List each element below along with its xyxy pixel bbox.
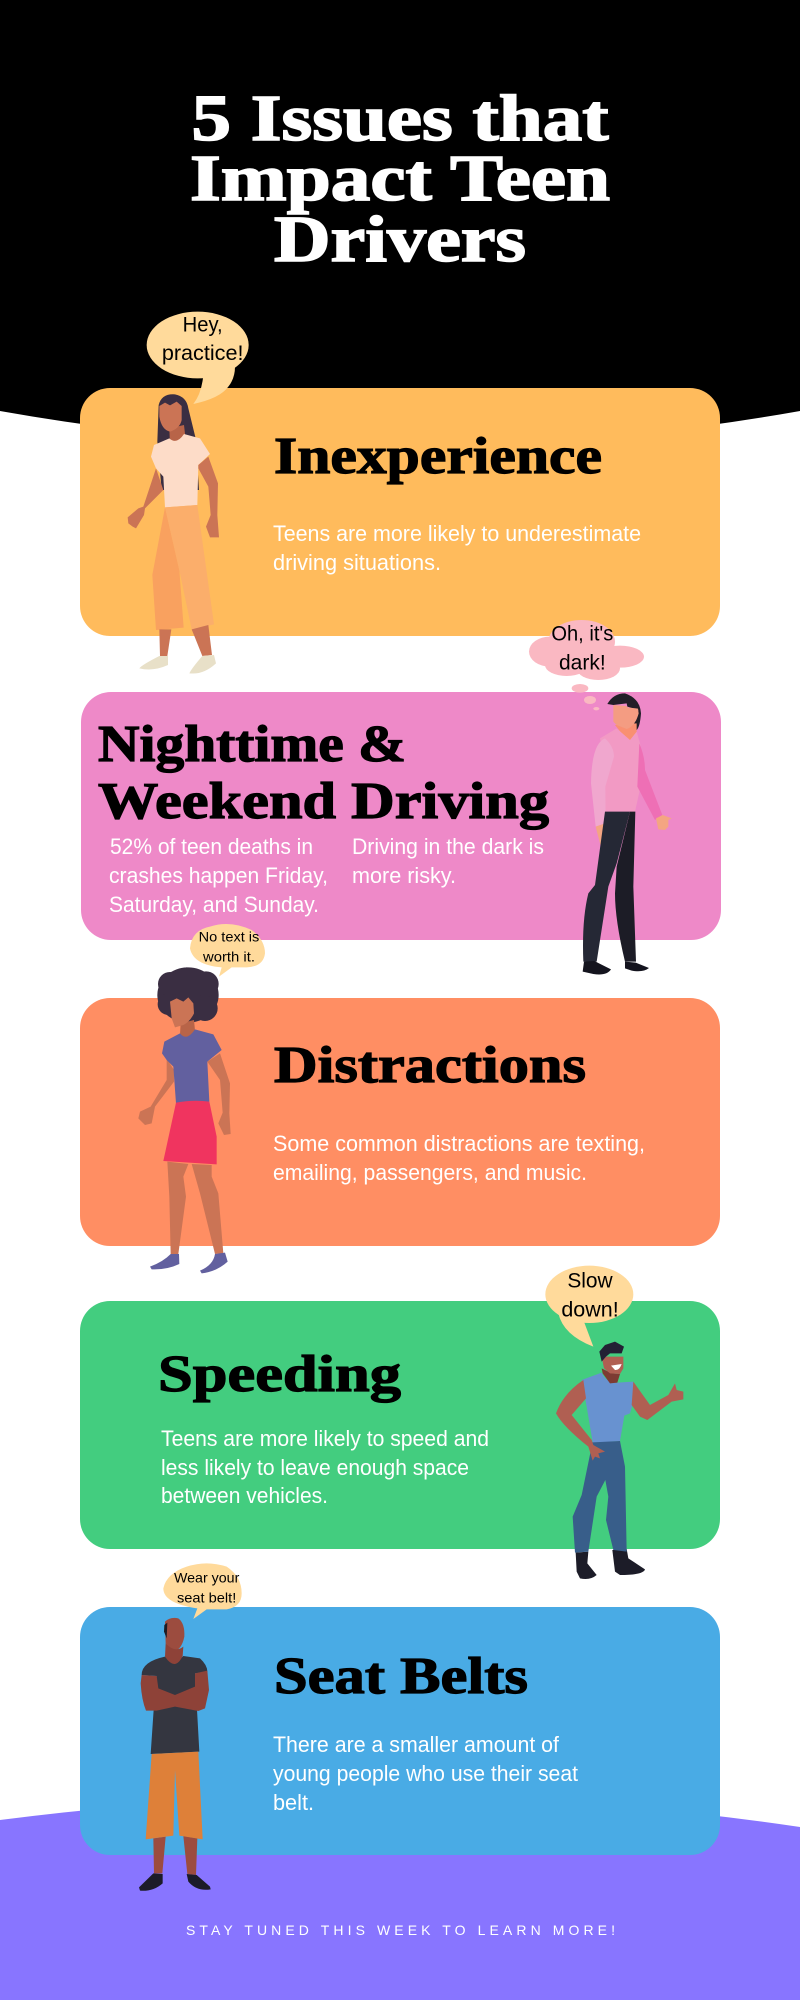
footer text: STAY TUNED THIS WEEK TO LEARN MORE!: [186, 1922, 615, 1938]
text: seat belts description: [273, 1732, 578, 1815]
heading: nighttime and weekend driving: [98, 716, 549, 830]
heading: nighttime and weekend driving: Nighttime &: [98, 716, 406, 773]
text: speeding description: [161, 1426, 489, 1508]
thought bubble: oh, it's dark: Oh, it's: [551, 623, 613, 646]
text: driving in the dark: [352, 834, 544, 888]
text: teen deaths statistic: [109, 834, 328, 917]
text: distractions description: [273, 1131, 645, 1185]
text: teen deaths statistic: crashes happen Friday,: [109, 863, 328, 888]
heading: speeding: Speeding: [158, 1346, 401, 1403]
text: seat belts description: belt.: [273, 1790, 314, 1815]
panel: inexperience: [80, 388, 720, 636]
heading: inexperience: Inexperience: [274, 428, 602, 485]
speech bubble: no text is worth it: worth it.: [202, 949, 255, 965]
speech bubble: wear your seat belt: [163, 1563, 242, 1619]
text: teen deaths statistic: 52% of teen deaths in: [110, 834, 313, 859]
thought bubble: oh, it's dark: dark!: [559, 651, 606, 674]
text: inexperience description: driving situations.: [273, 550, 441, 575]
panel: distractions: [80, 998, 720, 1246]
speech bubble: hey, practice: Hey,: [183, 314, 223, 337]
text: teen deaths statistic: Saturday, and Sunday.: [109, 892, 319, 917]
speech bubble: no text is worth it: No text is: [199, 929, 259, 945]
text: seat belts description: There are a smaller amount of: [273, 1732, 560, 1757]
text: driving in the dark: more risky.: [352, 863, 456, 888]
text: speeding description: Teens are more likely to speed and: [161, 1426, 489, 1451]
speech bubble: slow down: Slow: [567, 1270, 614, 1293]
figure: man with crossed arms and orange shorts with speech bubble: [139, 1563, 242, 1891]
figure: person in pink shirt with thought bubble: [529, 620, 672, 974]
text: speeding description: less likely to leave enough space: [161, 1455, 469, 1480]
text: seat belts description: young people who use their seat: [273, 1761, 578, 1786]
heading: nighttime and weekend driving: Weekend Driving: [98, 773, 549, 830]
figure: woman in peach top with speech bubble: [128, 312, 249, 674]
text: inexperience description: [273, 521, 641, 575]
text: speeding description: between vehicles.: [161, 1483, 328, 1508]
text: distractions description: emailing, passengers, and music.: [273, 1160, 587, 1185]
speech bubble: no text is worth it: [190, 924, 265, 977]
text: driving in the dark: Driving in the dark is: [352, 834, 544, 859]
text: distractions description: Some common distractions are texting,: [273, 1131, 645, 1156]
heading: distractions: Distractions: [274, 1037, 586, 1094]
heading: seat belts: Seat Belts: [274, 1648, 528, 1705]
panel: nighttime and weekend driving: [81, 692, 721, 940]
speech bubble: wear your seat belt: seat belt!: [177, 1590, 236, 1606]
purple footer background: [0, 1796, 800, 2000]
text: inexperience description: Teens are more likely to underestimate: [273, 521, 641, 546]
figure: man in blue shirt giving thumbs up with speech bubble: [545, 1266, 683, 1579]
title: [190, 82, 610, 276]
figure: woman in purple top and red skirt with speech bubble: [138, 924, 265, 1273]
speech bubble: slow down: down!: [561, 1299, 619, 1322]
panel: speeding: [80, 1301, 720, 1549]
thought bubble: oh, it's dark: [529, 620, 644, 710]
speech bubble: wear your seat belt: Wear your: [174, 1570, 240, 1586]
title: 5 Issues that: [192, 82, 609, 155]
speech bubble: slow down: [545, 1266, 633, 1347]
title: Impact Teen: [190, 142, 610, 215]
speech bubble: hey, practice: practice!: [162, 342, 243, 365]
panel: seat belts: [80, 1607, 720, 1855]
black header background: [0, 0, 800, 446]
speech bubble: hey, practice: [147, 312, 249, 404]
title: Drivers: [274, 203, 526, 276]
